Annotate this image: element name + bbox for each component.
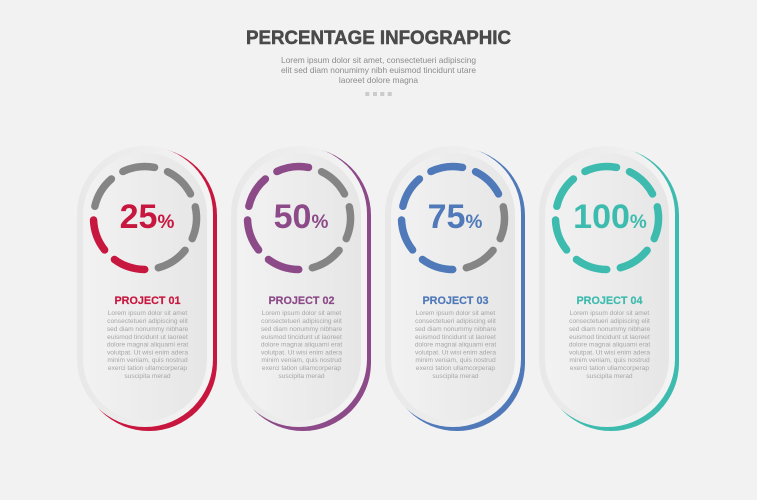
- progress ring 50%: [227, 146, 371, 290]
- body text: consectetueri adipiscing elit: [569, 318, 650, 325]
- body text: exerci tation ullamcorperap: [262, 365, 341, 372]
- coloured backing pill: [543, 148, 679, 431]
- body text: suscipita merad: [586, 373, 633, 380]
- inner pill: [391, 153, 515, 421]
- percentage 25%: 25%: [120, 198, 174, 236]
- outer pill: [77, 146, 213, 427]
- heading project 04: PROJECT 04: [576, 295, 643, 307]
- body text: minim veniam, quis nostrud: [415, 357, 496, 364]
- body text: suscipita merad: [432, 373, 479, 380]
- outer pill: [231, 146, 367, 427]
- body text: exerci tation ullamcorperap: [416, 365, 495, 372]
- coloured backing pill: [389, 148, 525, 431]
- title: PERCENTAGE INFOGRAPHIC: [246, 28, 511, 49]
- body text: consectetueri adipiscing elit: [107, 318, 188, 325]
- body text: suscipita merad: [278, 373, 325, 380]
- body text: Lorem ipsum dolor sit amet: [570, 310, 649, 317]
- subtitle text: laoreet dolore magna: [339, 75, 418, 85]
- body text: volutpat. Ut wisi enim adera: [107, 350, 188, 356]
- body text: Lorem ipsum dolor sit amet: [108, 310, 187, 317]
- body text: dolore magnai aliquami erat: [107, 342, 188, 348]
- body text: exerci tation ullamcorperap: [108, 365, 187, 372]
- progress ring 25%: [73, 146, 217, 290]
- coloured backing pill: [81, 148, 217, 431]
- body text: [107, 310, 189, 380]
- subtitle text: [281, 55, 476, 85]
- body text: sed diam nonummy nibhare: [261, 326, 343, 333]
- panel: project 03: [381, 146, 525, 431]
- panel: project 01: [73, 146, 217, 431]
- body text: consectetueri adipiscing elit: [415, 318, 496, 325]
- heading project 01: PROJECT 01: [114, 295, 181, 307]
- body text: euismod tincidunt ut laoreet: [415, 334, 496, 341]
- body text: volutpat. Ut wisi enim adera: [569, 350, 650, 356]
- panel: project 04: [535, 146, 679, 431]
- body text: sed diam nonummy nibhare: [107, 326, 189, 333]
- inner pill: [237, 153, 361, 421]
- body text: [415, 310, 497, 380]
- percentage 100%: 100%: [573, 198, 647, 236]
- panel: project 02: [227, 146, 371, 431]
- body text: [261, 310, 343, 380]
- subtitle text: elit sed diam nonumimy nibh euismod tincidunt utare: [281, 65, 476, 75]
- pagination dots: [365, 92, 392, 96]
- body text: [569, 310, 651, 380]
- body text: exerci tation ullamcorperap: [570, 365, 649, 372]
- heading project 03: PROJECT 03: [422, 295, 489, 307]
- subtitle text: Lorem ipsum dolor sit amet, consectetueri adipiscing: [281, 55, 476, 65]
- outer pill: [539, 146, 675, 427]
- progress ring 75%: [381, 146, 525, 290]
- body text: minim veniam, quis nostrud: [107, 357, 188, 364]
- body text: sed diam nonummy nibhare: [415, 326, 497, 333]
- coloured backing pill: [235, 148, 371, 431]
- body text: suscipita merad: [124, 373, 171, 380]
- body text: Lorem ipsum dolor sit amet: [262, 310, 341, 317]
- body text: sed diam nonummy nibhare: [569, 326, 651, 333]
- inner pill: [83, 153, 207, 421]
- body text: minim veniam, quis nostrud: [569, 357, 650, 364]
- body text: Lorem ipsum dolor sit amet: [416, 310, 495, 317]
- percentage 50%: 50%: [274, 198, 328, 236]
- progress ring 100%: [535, 146, 679, 290]
- body text: volutpat. Ut wisi enim adera: [415, 350, 496, 356]
- body text: euismod tincidunt ut laoreet: [107, 334, 188, 341]
- body text: dolore magnai aliquami erat: [261, 342, 342, 348]
- heading project 02: PROJECT 02: [268, 295, 335, 307]
- body text: volutpat. Ut wisi enim adera: [261, 350, 342, 356]
- inner pill: [545, 153, 669, 421]
- body text: consectetueri adipiscing elit: [261, 318, 342, 325]
- body text: euismod tincidunt ut laoreet: [569, 334, 650, 341]
- body text: dolore magnai aliquami erat: [415, 342, 496, 348]
- outer pill: [385, 146, 521, 427]
- percentage 75%: 75%: [428, 198, 482, 236]
- body text: euismod tincidunt ut laoreet: [261, 334, 342, 341]
- body text: minim veniam, quis nostrud: [261, 357, 342, 364]
- body text: dolore magnai aliquami erat: [569, 342, 650, 348]
